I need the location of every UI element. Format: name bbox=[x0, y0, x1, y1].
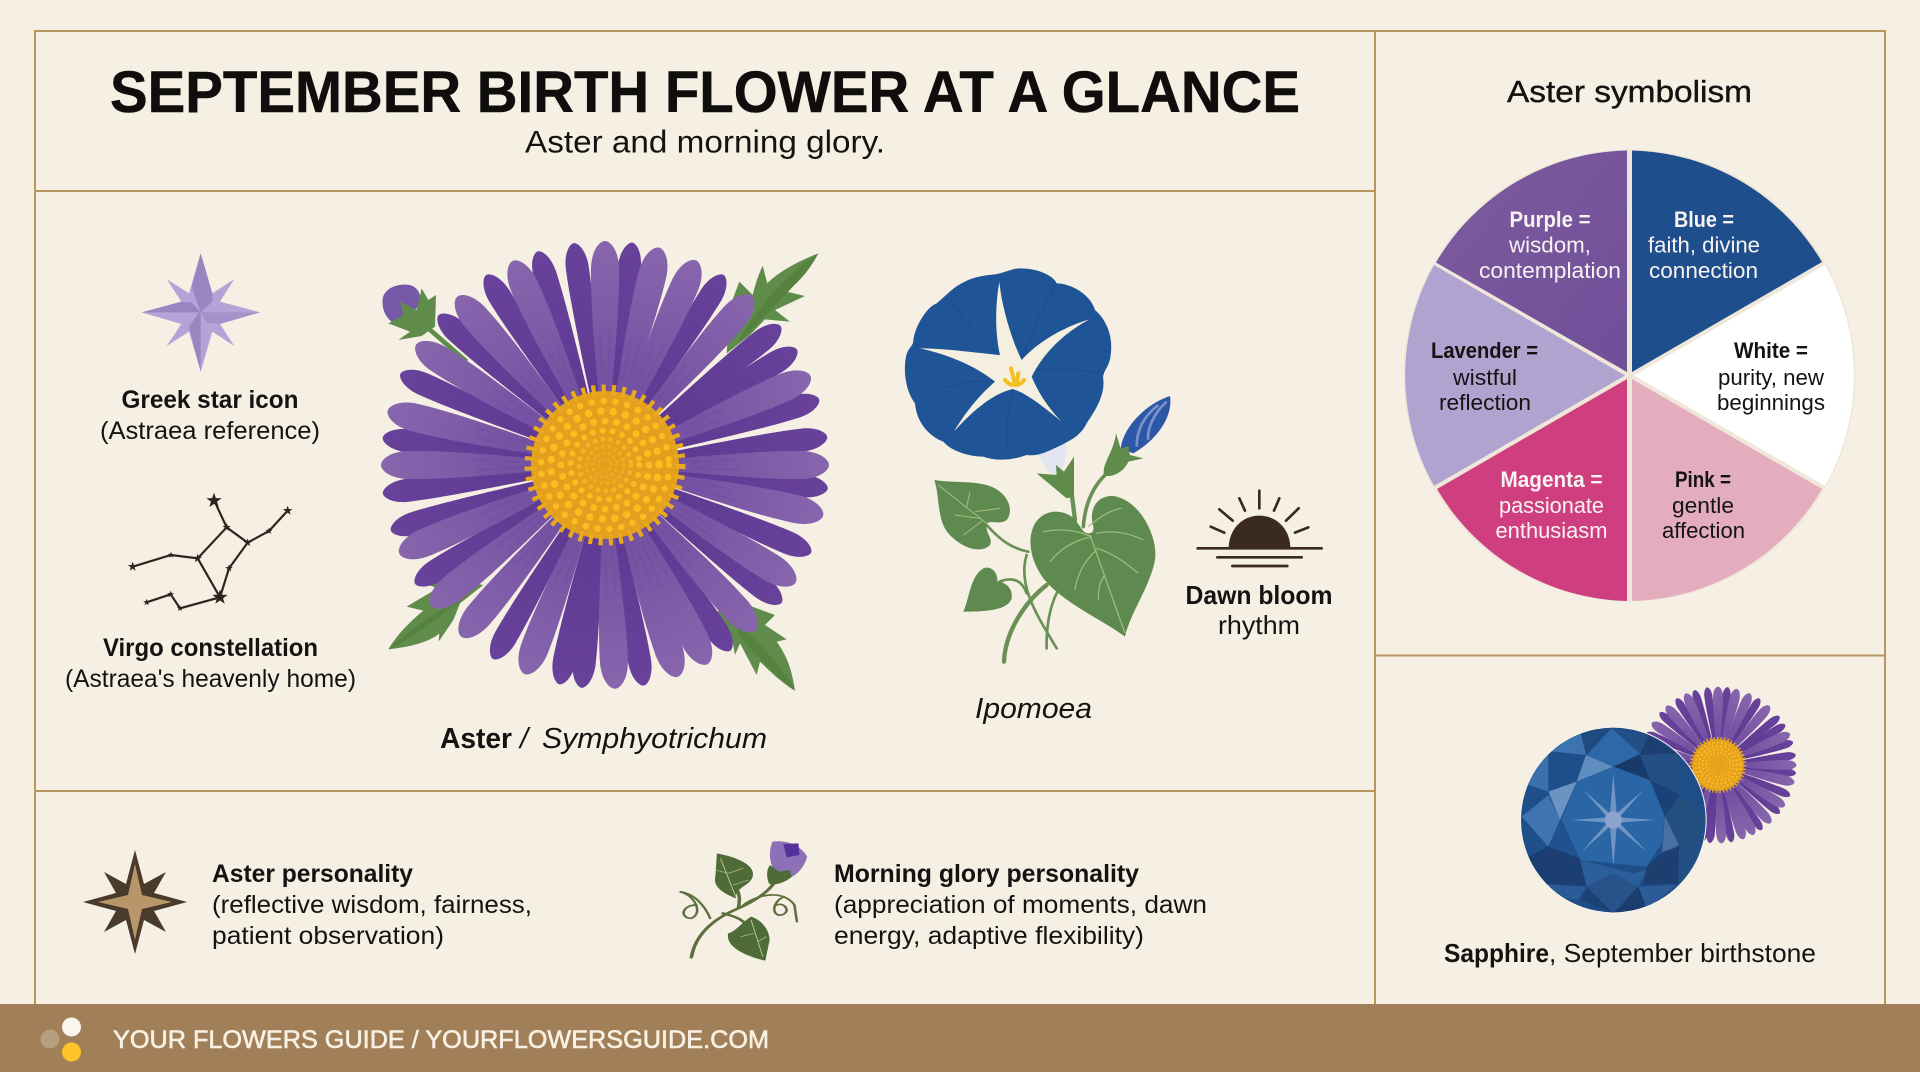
caption: aster bbox=[440, 723, 767, 755]
wedge: magenta: enthusiasm bbox=[1496, 518, 1608, 543]
icon: compass star bbox=[83, 850, 187, 954]
wedge: magenta bbox=[1437, 379, 1627, 601]
pie backing bbox=[1404, 150, 1856, 602]
icon: morning glory vine bbox=[680, 841, 807, 961]
small leaf lower bbox=[963, 568, 1012, 612]
caption: aster: Aster bbox=[440, 723, 512, 755]
wedge: white: purity, new bbox=[1718, 365, 1825, 390]
big leaf bbox=[1030, 496, 1155, 637]
panel: sapphire birthstone bbox=[1444, 687, 1816, 968]
big leaf veins bbox=[1043, 508, 1143, 633]
caption: aster: Symphyotrichum bbox=[542, 723, 767, 755]
flower stamens bbox=[1005, 368, 1024, 385]
wedge: magenta: Magenta = bbox=[1500, 467, 1602, 492]
wedge: white: White = bbox=[1734, 338, 1808, 363]
wedge: purple bbox=[1436, 150, 1627, 372]
wedge: pink bbox=[1632, 379, 1822, 601]
flower white star bbox=[920, 282, 1089, 432]
text: aster personality traits: (reflective wisdom, fairness, bbox=[212, 891, 532, 919]
label: rhythm: rhythm bbox=[1218, 610, 1300, 640]
label: dawn bloom: Dawn bloom bbox=[1186, 580, 1332, 610]
footer logo dots bbox=[40, 1018, 81, 1062]
aster leaves and bud bbox=[382, 253, 818, 691]
wedge: lavender: reflection bbox=[1439, 390, 1531, 415]
illustration: aster flower bbox=[381, 241, 829, 691]
bud bbox=[1121, 396, 1170, 453]
wedge: pink: affection bbox=[1662, 518, 1745, 543]
footer bar bbox=[0, 1004, 1920, 1072]
wedge: lavender bbox=[1405, 265, 1625, 486]
wedge: blue: Blue = bbox=[1674, 207, 1734, 232]
bud calyx bbox=[1104, 433, 1143, 476]
caption: ipomoea: Ipomoea bbox=[975, 693, 1092, 725]
icon: sapphire gem bbox=[1521, 728, 1707, 912]
text: morning glory traits bbox=[834, 891, 1207, 950]
wedge: pink: Pink = bbox=[1675, 467, 1731, 492]
wedge: blue: connection bbox=[1649, 258, 1758, 283]
text: aster personality traits bbox=[212, 891, 532, 950]
wedge: purple: wisdom, bbox=[1508, 232, 1591, 258]
flower veins bbox=[920, 283, 1100, 455]
stems bbox=[987, 475, 1105, 662]
panel: morning glory personality bbox=[680, 841, 1207, 961]
panel: aster personality bbox=[83, 850, 532, 954]
text: morning glory heading: Morning glory personality bbox=[834, 860, 1139, 888]
subtitle: Aster and morning glory. bbox=[525, 124, 885, 160]
label: astraea reference: (Astraea reference) bbox=[100, 417, 320, 445]
illustration: morning glory bbox=[905, 268, 1170, 662]
wedge: pink: gentle bbox=[1672, 493, 1734, 518]
icon: small aster bbox=[1640, 687, 1796, 844]
icon: rising sun bbox=[1198, 491, 1322, 566]
wedge: white: beginnings bbox=[1717, 390, 1825, 415]
text: aster personality traits: patient observation) bbox=[212, 922, 444, 950]
panel: virgo constellation bbox=[65, 493, 356, 693]
caption: sapphire: Sapphire bbox=[1444, 938, 1549, 968]
icon: greek star bbox=[142, 253, 260, 372]
wedge: white bbox=[1634, 265, 1854, 486]
wedge: purple: Purple = bbox=[1510, 207, 1590, 232]
label: virgo constellation: Virgo constellation bbox=[103, 634, 318, 662]
wedge: lavender: wistful bbox=[1452, 365, 1517, 390]
title: SEPTEMBER BIRTH FLOWER AT A GLANCE bbox=[110, 60, 1300, 125]
flower calyx bbox=[1037, 457, 1074, 498]
icon: virgo constellation bbox=[128, 493, 292, 611]
caption: sapphire: , September birthstone bbox=[1549, 938, 1816, 968]
label: greek star icon: Greek star icon bbox=[122, 386, 298, 414]
small leaf upper bbox=[934, 480, 1010, 549]
flower corolla bbox=[905, 268, 1111, 460]
caption: aster: / bbox=[518, 723, 531, 755]
wedge: blue bbox=[1632, 150, 1822, 372]
aster flower head bbox=[381, 241, 829, 689]
heading: aster symbolism: Aster symbolism bbox=[1507, 74, 1752, 109]
wedge: magenta: passionate bbox=[1499, 493, 1604, 518]
panel: greek star bbox=[100, 253, 320, 445]
text: aster personality heading: Aster personality bbox=[212, 860, 413, 888]
wedge: purple: contemplation bbox=[1479, 258, 1621, 283]
text: morning glory traits: energy, adaptive flexibility) bbox=[834, 922, 1144, 950]
footer text: YOUR FLOWERS GUIDE / YOURFLOWERSGUIDE.COM bbox=[113, 1026, 769, 1054]
pie chart: aster symbolism bbox=[1404, 150, 1856, 602]
wedge: lavender: Lavender = bbox=[1431, 338, 1538, 363]
label: astraea's heavenly home: (Astraea's heavenly home) bbox=[65, 665, 356, 693]
flower tube bbox=[1037, 443, 1066, 477]
text: morning glory traits: (appreciation of moments, dawn bbox=[834, 891, 1207, 919]
wedge: blue: faith, divine bbox=[1648, 232, 1760, 258]
panel: dawn bloom bbox=[1186, 491, 1332, 640]
